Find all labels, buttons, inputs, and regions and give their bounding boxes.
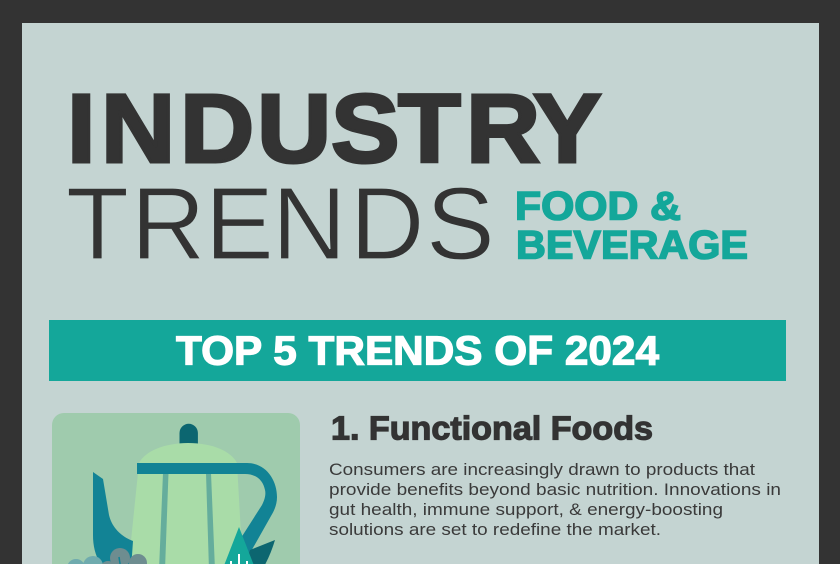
illustration: coffee pot panel <box>52 413 300 564</box>
text block: functional foods description: Consumers are increasingly drawn to products that <box>329 461 755 479</box>
icon: pot body <box>128 443 243 564</box>
icon: pot handle <box>137 463 277 562</box>
icon: pot spout <box>93 472 133 564</box>
icon: teal leaf <box>224 527 254 564</box>
text block: functional foods description: solutions are set to redefine the market. <box>329 521 661 539</box>
text block: functional foods description <box>329 461 781 539</box>
text block: functional foods description: provide benefits beyond basic nutrition. Innovations in <box>329 481 781 499</box>
icon: dark leaf <box>249 540 275 564</box>
icon: pot stripes <box>159 473 215 564</box>
banner: top 5 trends: TOP 5 TRENDS OF 2024 <box>176 328 659 374</box>
title <box>66 76 602 281</box>
icon: grapes <box>67 548 147 564</box>
text block: functional foods description: gut health, immune support, & energy-boosting <box>329 501 723 519</box>
title line: INDUSTRY: INDUSTRY <box>67 76 602 183</box>
subtitle: food and beverage: FOOD & <box>515 184 681 228</box>
icon: pot knob <box>180 424 198 444</box>
subtitle: food and beverage: BEVERAGE <box>516 224 748 268</box>
heading: functional foods: 1. Functional Foods <box>331 410 653 446</box>
banner: top 5 trends <box>49 320 786 381</box>
subtitle: food and beverage <box>515 184 748 268</box>
title line: TRENDS: TRENDS <box>66 166 495 281</box>
